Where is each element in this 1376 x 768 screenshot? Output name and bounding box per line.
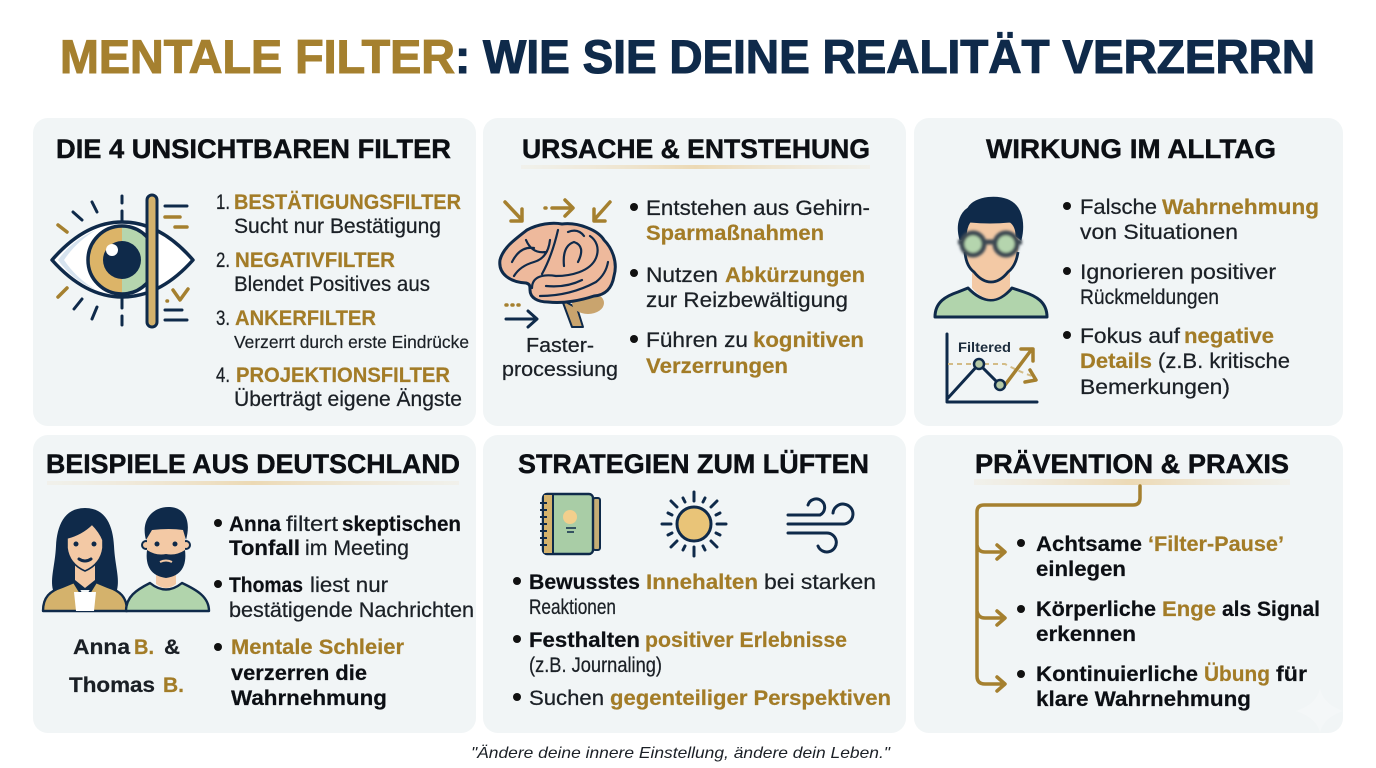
bullet list: wirkung: negative: [1184, 325, 1274, 348]
filter list: NEGATIVFILTER: [235, 249, 395, 272]
brain caption: Faster-: [526, 335, 594, 357]
icon: journal: [540, 494, 600, 554]
panel: die 4 unsichtbaren filter: [33, 118, 476, 426]
bullet list: ursache: zur Reizbewältigung: [646, 289, 848, 312]
bullet list: wirkung: Falsche: [1080, 196, 1157, 219]
bullet list: strategien: (z.B. Journaling): [529, 654, 662, 677]
bullet list: wirkung: Bemerkungen): [1080, 376, 1230, 399]
bullet list: strategien: Reaktionen: [529, 596, 616, 619]
chart: filtered: Filtered: [958, 339, 1011, 355]
heading: ursache: URSACHE & ENTSTEHUNG: [522, 134, 870, 164]
names: [69, 636, 184, 697]
panel: strategien zum lueften: [483, 435, 906, 733]
filter list: 3.: [216, 307, 230, 330]
bullet list: praevention: als Signal: [1222, 598, 1320, 621]
title: [60, 30, 1315, 83]
names: &: [164, 636, 180, 659]
title: : WIE SIE DEINE REALITÄT VERZERRN: [455, 30, 1315, 83]
filter list: [216, 191, 469, 411]
bullet list: ursache: [630, 197, 870, 378]
bullet list: praevention: Kontinuierliche: [1036, 663, 1198, 686]
bullet list: beispiele: Tonfall: [229, 537, 300, 560]
panel: beispiele aus deutschland: [33, 435, 476, 733]
heading: filter: DIE 4 UNSICHTBAREN FILTER: [56, 134, 451, 164]
bullet list: strategien: Suchen: [529, 687, 604, 710]
bullet list: wirkung: Ignorieren positiver: [1080, 261, 1276, 284]
bullet list: ursache: Verzerrungen: [646, 355, 788, 378]
icon: brain with arrows: [500, 200, 615, 327]
bullet list: ursache: kognitiven: [753, 329, 864, 352]
heading: wirkung: WIRKUNG IM ALLTAG: [986, 134, 1276, 164]
bullet list: wirkung: Rückmeldungen: [1080, 286, 1219, 309]
bullet list: wirkung: [1063, 196, 1319, 399]
filter list: 1.: [216, 191, 230, 214]
names: B.: [163, 674, 184, 697]
bullet list: praevention: klare Wahrnehmung: [1036, 688, 1251, 711]
names: B.: [134, 636, 154, 659]
chart: filtered: [947, 334, 1037, 402]
icon: wind: [788, 499, 853, 552]
bullet list: ursache: Nutzen: [646, 264, 718, 287]
bullet list: praevention: einlegen: [1036, 558, 1126, 581]
bullet list: praevention: [1017, 533, 1320, 711]
bullet list: beispiele: skeptischen: [342, 513, 461, 536]
bullet list: strategien: Bewusstes: [529, 571, 640, 594]
bullet list: strategien: [513, 571, 891, 710]
bullet list: ursache: Sparmaßnahmen: [646, 222, 824, 245]
bullet list: praevention: Übung: [1204, 663, 1270, 686]
filter list: BESTÄTIGUNGSFILTER: [234, 191, 461, 214]
bullet list: beispiele: Anna: [229, 513, 281, 536]
bullet list: beispiele: Mentale Schleier: [231, 636, 404, 659]
icon: anna and thomas: [43, 507, 209, 611]
bullet list: strategien: bei starken: [764, 571, 876, 594]
bullet list: beispiele: Wahrnehmung: [231, 687, 387, 710]
quote: "Ändere deine innere Einstellung, ändere dein Leben.": [471, 744, 891, 762]
bullet list: beispiele: [214, 513, 474, 710]
icon: sparkle: [1296, 688, 1343, 733]
bullet list: strategien: positiver Erlebnisse: [645, 629, 847, 652]
filter list: 4.: [216, 364, 230, 387]
icon: eye with filter bar: [52, 195, 193, 327]
icon: person with blurred glasses: [935, 197, 1047, 317]
bullet list: praevention: Enge: [1162, 598, 1216, 621]
bullet list: ursache: Führen zu: [646, 329, 748, 352]
brain caption: [502, 335, 618, 381]
filter list: ANKERFILTER: [235, 307, 376, 330]
panel: praevention und praxis: [914, 435, 1343, 733]
bullet list: wirkung: Fokus auf: [1080, 325, 1180, 348]
bullet list: beispiele: verzerren die: [231, 662, 367, 685]
filter list: Überträgt eigene Ängste: [234, 388, 462, 411]
bullet list: praevention: ‘Filter-Pause’: [1148, 533, 1284, 556]
bullet list: wirkung: von Situationen: [1080, 221, 1238, 244]
bullet list: beispiele: im Meeting: [305, 537, 409, 560]
filter list: Blendet Positives aus: [234, 273, 430, 296]
filter list: 2.: [216, 249, 230, 272]
bullet list: beispiele: filtert: [286, 513, 338, 536]
heading: strategien: STRATEGIEN ZUM LÜFTEN: [518, 449, 869, 479]
panel: wirkung im alltag: [914, 118, 1343, 426]
bullet list: strategien: Festhalten: [529, 629, 640, 652]
bullet list: praevention: Körperliche: [1036, 598, 1156, 621]
heading: praevention: PRÄVENTION & PRAXIS: [975, 449, 1289, 479]
bullet list: wirkung: Wahrnehmung: [1162, 196, 1319, 219]
bullet list: wirkung: (z.B. kritische: [1158, 350, 1290, 373]
filter list: PROJEKTIONSFILTER: [236, 364, 450, 387]
filter list: Sucht nur Bestätigung: [234, 215, 441, 238]
bullet list: praevention: für: [1276, 663, 1307, 686]
arrow tree: [977, 486, 1140, 691]
filter list: Verzerrt durch erste Eindrücke: [234, 332, 469, 352]
bullet list: strategien: Innehalten: [646, 571, 758, 594]
bullet list: ursache: Entstehen aus Gehirn-: [646, 197, 870, 220]
brain caption: processiung: [502, 359, 618, 381]
bullet list: strategien: gegenteiliger Perspektiven: [610, 687, 891, 710]
bullet list: beispiele: bestätigende Nachrichten: [229, 599, 474, 622]
bullet list: beispiele: Thomas: [229, 574, 303, 597]
bullet list: ursache: Abkürzungen: [725, 264, 865, 287]
names: Anna: [73, 636, 130, 659]
bullet list: praevention: erkennen: [1036, 623, 1136, 646]
names: Thomas: [69, 674, 155, 697]
icon: sun: [662, 492, 726, 556]
bullet list: beispiele: liest nur: [310, 574, 388, 597]
title: MENTALE FILTER: [60, 30, 455, 83]
panel: ursache und entstehung: [483, 118, 906, 426]
bullet list: wirkung: Details: [1080, 350, 1152, 373]
heading: beispiele: BEISPIELE AUS DEUTSCHLAND: [46, 449, 460, 479]
bullet list: praevention: Achtsame: [1036, 533, 1142, 556]
